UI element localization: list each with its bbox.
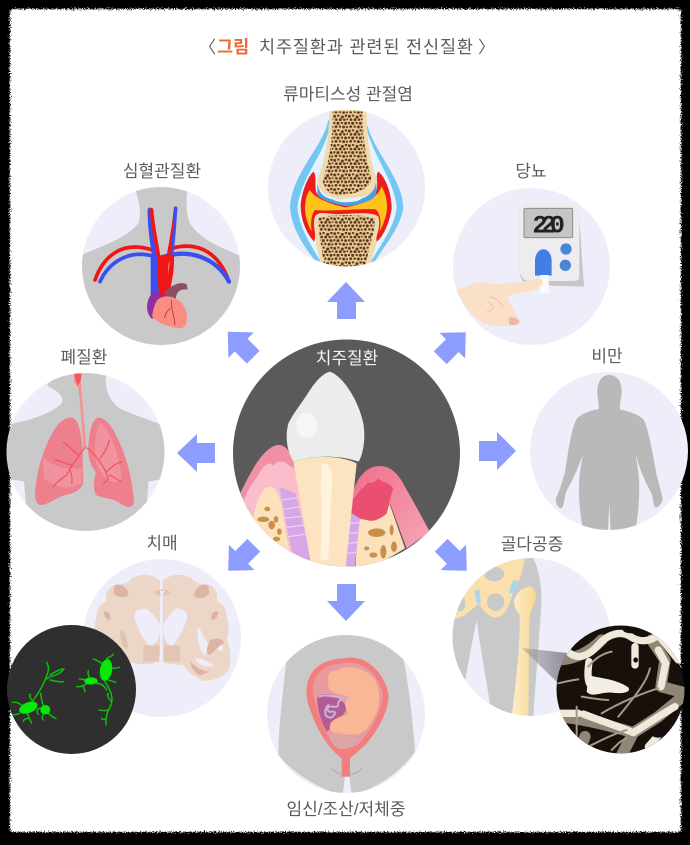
inset: bone microstructure (522, 626, 687, 758)
inset: neurons (7, 625, 136, 754)
label: rheumatoid arthritis: 류마티스성 관절염 (283, 85, 413, 104)
test strip (540, 275, 549, 293)
background circle: osteoporosis (452, 558, 610, 716)
label: obesity: 비만 (591, 347, 623, 366)
title: 〉 (478, 38, 495, 57)
neuron cell bodies (17, 658, 114, 716)
label: cardiovascular disease: 심혈관질환 (123, 162, 201, 181)
illustration: tooth and gums (240, 372, 430, 573)
illustration: brain cross section (94, 575, 230, 681)
arrow: down to pregnancy (327, 584, 365, 621)
right ligament (346, 513, 360, 566)
label: lung disease: 폐질환 (61, 348, 107, 367)
label: diabetes: 당뇨 (515, 162, 547, 181)
background circle: diabetes (453, 188, 610, 345)
arrow: up-left to heart (215, 319, 266, 370)
illustration: glucose meter and finger (457, 203, 584, 326)
bone strut blob (587, 675, 629, 695)
illustration: obese silhouette (556, 375, 663, 532)
title: 그림 (217, 37, 249, 57)
device body (519, 203, 584, 287)
illustration: torso and lungs (7, 370, 167, 535)
illustration: joint (290, 110, 403, 267)
label: osteoporosis: 골다공증 (501, 535, 563, 554)
meter reading: 220 (532, 211, 565, 240)
arrow: down-left to dementia (215, 532, 267, 584)
illustration: torso, vessels and heart (78, 185, 242, 352)
left ligament (280, 486, 310, 560)
trabecular bone texture (558, 627, 687, 758)
crown highlight (296, 412, 317, 438)
arrow: down-right to osteoporosis (428, 532, 480, 584)
illustration: uterus and fetus (278, 633, 415, 795)
arrow: up to arthritis (327, 282, 365, 319)
panel: cardiovascular disease (78, 162, 242, 352)
title: 치주질환과 관련된 전신질환 (259, 37, 473, 57)
title: 〈 (199, 38, 216, 57)
magnifier cone (522, 648, 567, 682)
label: pregnancy and low birth weight: 임신/조산/저체중 (287, 800, 405, 819)
arrow: left to lung (177, 434, 215, 472)
left bone (254, 486, 290, 551)
background circle: cardiovascular (82, 187, 240, 345)
background circle: pregnancy (267, 635, 425, 793)
center circle background (233, 340, 460, 566)
background circle: lung (6, 373, 164, 531)
arrow: right to obesity (479, 432, 516, 470)
left gum (240, 445, 308, 558)
panel: dementia (83, 534, 241, 717)
neuron illustration (13, 654, 119, 725)
panel: obesity (530, 347, 688, 532)
illustration: hip and femur (448, 557, 541, 717)
device buttons (560, 243, 572, 271)
label: dementia: 치매 (146, 534, 178, 553)
right gum (350, 466, 430, 548)
panel: rheumatoid arthritis (268, 85, 425, 267)
panel: pregnancy (267, 633, 425, 819)
root highlight (320, 464, 332, 560)
background circle: dementia (83, 559, 241, 717)
panel: lung disease (6, 348, 167, 535)
arrow: up-right to diabetes (427, 319, 479, 371)
hand (457, 278, 543, 326)
tooth root (293, 457, 357, 573)
tooth crown (287, 372, 364, 462)
background circle: joint (268, 110, 425, 266)
inset circle background (7, 625, 136, 754)
label: periodontal disease: 치주질환 (316, 349, 378, 368)
inset circle background (556, 626, 684, 754)
panel: osteoporosis (448, 535, 610, 717)
panel: periodontal disease (233, 340, 460, 573)
right bone (355, 503, 405, 573)
background circle: obesity (530, 372, 688, 530)
test strip slot (535, 249, 552, 276)
panel: diabetes (453, 162, 610, 345)
